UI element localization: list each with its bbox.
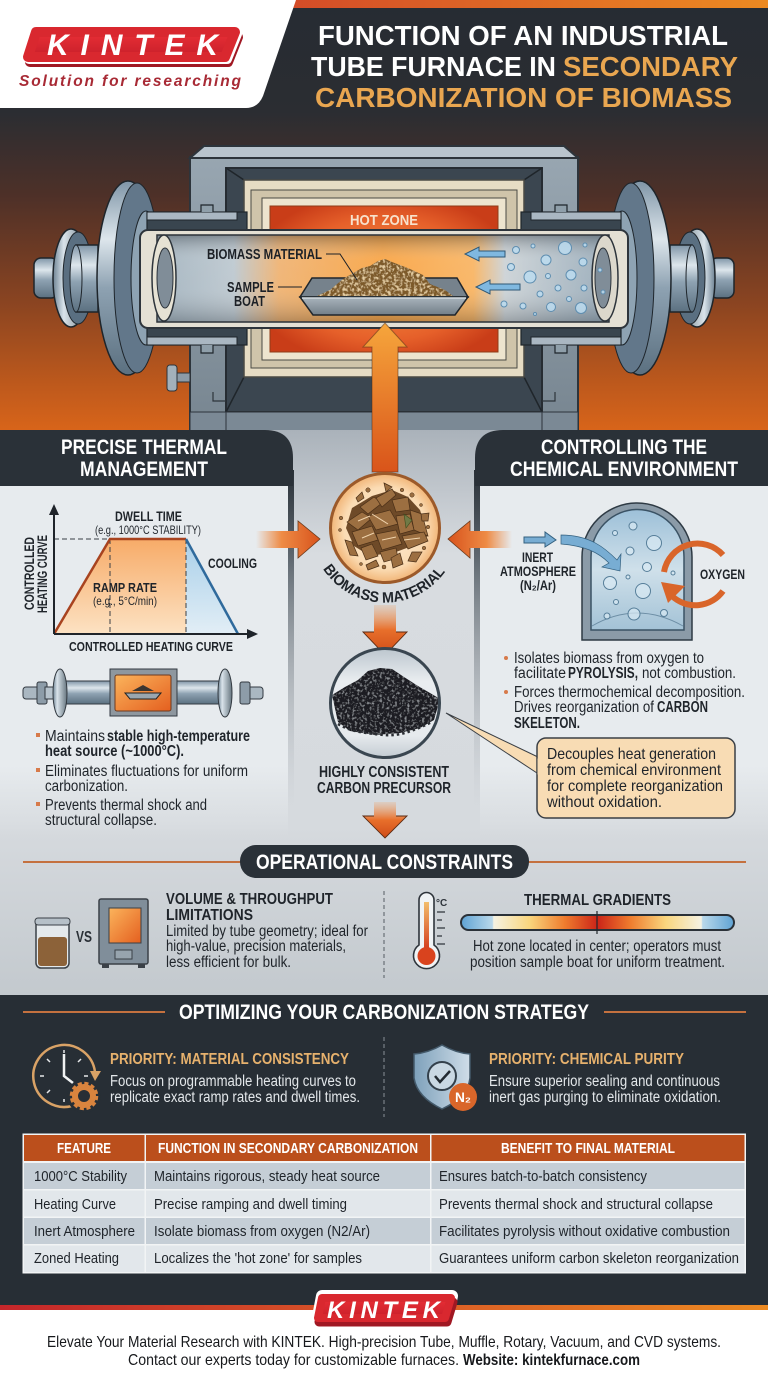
diagram: sealed inert chamber bbox=[582, 503, 692, 640]
bullet list: thermal bbox=[36, 728, 250, 829]
label: inert atmosphere bbox=[500, 549, 576, 593]
right flange assembly bbox=[521, 181, 734, 375]
text: material consistency: PRIORITY: MATERIAL CONSISTENCY bbox=[110, 1051, 350, 1068]
bullet list: chemical: SKELETON. bbox=[514, 715, 580, 732]
footer logo: KINTEK bbox=[327, 1297, 442, 1324]
text: chemical purity: PRIORITY: CHEMICAL PURITY bbox=[489, 1051, 685, 1068]
bullet list: chemical: CARBON bbox=[657, 699, 708, 716]
text: volume and throughput: LIMITATIONS bbox=[166, 907, 253, 924]
text: volume and throughput: Limited by tube geometry; ideal for bbox=[166, 923, 368, 940]
table row: inert atmosphere bbox=[34, 1223, 730, 1240]
heading: PRECISE THERMAL bbox=[61, 436, 227, 459]
heading: CONTROLLING THE bbox=[541, 436, 707, 459]
table row: inert atmosphere: Facilitates pyrolysis without oxidative combustion bbox=[439, 1223, 730, 1240]
logo panel bbox=[0, 0, 296, 108]
text: chemical purity: Ensure superior sealing and continuous bbox=[489, 1073, 720, 1090]
label: inert atmosphere: INERT bbox=[522, 549, 553, 565]
icon: sample jar bbox=[35, 918, 70, 968]
table row: 1000°C stability: 1000°C Stability bbox=[34, 1168, 127, 1185]
heading: MANAGEMENT bbox=[80, 458, 208, 481]
label: biomass material: BIOMASS MATERIAL bbox=[207, 247, 322, 263]
table header: FEATURE bbox=[57, 1141, 111, 1157]
title: FUNCTION OF AN INDUSTRIAL bbox=[318, 20, 728, 51]
chart label: cooling: COOLING bbox=[208, 556, 257, 571]
arrow: biomass to carbon bbox=[363, 605, 407, 655]
arrow: heat from furnace to biomass bbox=[363, 323, 407, 472]
panel: precise thermal management bbox=[0, 430, 294, 836]
chart label: dwell time: DWELL TIME bbox=[115, 509, 182, 524]
logo tagline: Solution for researching bbox=[19, 73, 242, 90]
chart label: dwell time bbox=[95, 509, 201, 537]
icon: miniature tube furnace bbox=[23, 669, 263, 717]
bullet list: chemical: not combustion. bbox=[642, 665, 736, 682]
table row: 1000°C stability: Maintains rigorous, steady heat source bbox=[154, 1168, 380, 1185]
callout: decoupling: from chemical environment bbox=[547, 762, 721, 779]
icon: thermometer: °C bbox=[436, 898, 447, 909]
gas flow arrow upper bbox=[465, 247, 505, 261]
label: carbon precursor: HIGHLY CONSISTENT bbox=[319, 764, 449, 781]
table header bbox=[24, 1135, 744, 1161]
logo: KINTEK badge: KINTEK bbox=[47, 29, 220, 62]
label: inert atmosphere: ATMOSPHERE bbox=[500, 563, 576, 579]
bullet list: thermal: Eliminates fluctuations for uniform bbox=[45, 763, 248, 780]
bullet list: thermal: carbonization. bbox=[45, 778, 128, 795]
icon: shield with N2 bbox=[414, 1045, 477, 1111]
label: carbon precursor bbox=[317, 764, 451, 797]
text: thermal gradients: Hot zone located in center; operators must bbox=[473, 938, 722, 955]
label: hot zone: HOT ZONE bbox=[350, 212, 418, 229]
sample boat with biomass pile bbox=[300, 259, 468, 315]
callout: decoupling: without oxidation. bbox=[546, 794, 662, 811]
table header: BENEFIT TO FINAL MATERIAL bbox=[501, 1141, 675, 1157]
label: biomass material bbox=[207, 247, 357, 280]
chart x-axis label: CONTROLLED HEATING CURVE bbox=[69, 639, 233, 654]
bullet list: chemical: Drives reorganization of bbox=[514, 699, 655, 716]
accent bar top bbox=[0, 0, 768, 8]
arrow: output downward bbox=[363, 802, 407, 838]
table header: FUNCTION IN SECONDARY CARBONIZATION bbox=[158, 1141, 418, 1157]
chart label: ramp rate bbox=[93, 580, 157, 608]
table row: zoned heating: Localizes the 'hot zone' for samples bbox=[154, 1250, 362, 1267]
gas flow arrow lower bbox=[476, 280, 520, 294]
text: material consistency: replicate exact ramp rates and dwell times. bbox=[110, 1089, 360, 1106]
label: oxygen: OXYGEN bbox=[700, 566, 745, 582]
bullet list: thermal: Prevents thermal shock and bbox=[45, 797, 207, 814]
table: features bbox=[22, 1134, 746, 1274]
table row: zoned heating: Zoned Heating bbox=[34, 1250, 119, 1267]
footer text: Website: kintekfurnace.com bbox=[463, 1352, 640, 1369]
table row: 1000°C stability: Ensures batch-to-batch consistency bbox=[439, 1168, 647, 1185]
icon: thermometer bbox=[414, 893, 447, 969]
label: inert atmosphere: (N₂/Ar) bbox=[520, 577, 556, 593]
inert gas bubbles bbox=[501, 242, 605, 316]
arrow: oxygen blocked loop bbox=[661, 544, 723, 605]
text: volume and throughput: less efficient for bulk. bbox=[166, 954, 291, 971]
text: thermal gradients bbox=[461, 892, 734, 971]
text: volume and throughput: VOLUME & THROUGHPUT bbox=[166, 891, 333, 908]
section: optimizing strategy dark background bbox=[0, 995, 768, 1306]
section heading: optimizing: OPTIMIZING YOUR CARBONIZATION STRATEGY bbox=[179, 1001, 589, 1024]
top background gradient bbox=[0, 0, 768, 432]
chart y-axis label bbox=[22, 535, 50, 613]
icon: box furnace bbox=[99, 899, 148, 968]
bullet list: chemical: Isolates biomass from oxygen to bbox=[514, 650, 704, 667]
label: biomass material curved: BIOMASS MATERIAL bbox=[323, 564, 445, 603]
arrow: inert gas in bbox=[524, 532, 556, 547]
label: sample boat: SAMPLE bbox=[227, 280, 274, 296]
left flange assembly bbox=[34, 181, 247, 391]
arrow: inert gas curved flow bbox=[561, 535, 621, 571]
text: volume and throughput bbox=[166, 891, 368, 971]
callout: decoupling bbox=[446, 713, 735, 818]
text: thermal gradients: position sample boat for uniform treatment. bbox=[470, 954, 725, 971]
glass process tube bbox=[140, 230, 628, 328]
label: sample boat: BOAT bbox=[234, 294, 265, 310]
text: material consistency bbox=[110, 1051, 360, 1106]
bullet list: chemical: PYROLYSIS, bbox=[568, 665, 638, 682]
chart: controlled heating curve bbox=[22, 504, 258, 654]
text: thermal gradients: THERMAL GRADIENTS bbox=[524, 892, 671, 909]
tube furnace illustration bbox=[34, 146, 734, 440]
arrow: chemical environment input bbox=[448, 521, 512, 558]
callout: decoupling: for complete reorganization bbox=[547, 778, 723, 795]
table row: heating curve bbox=[34, 1196, 713, 1213]
chart y-axis label: HEATING CURVE bbox=[35, 535, 50, 613]
heading bbox=[61, 436, 227, 481]
icon: clock and gear bbox=[33, 1045, 101, 1113]
bullet list: thermal: heat source (~1000°C). bbox=[45, 743, 184, 760]
chart label: ramp rate: RAMP RATE bbox=[93, 580, 157, 595]
panel: controlling the chemical environment bbox=[474, 430, 768, 836]
chart y-axis label: CONTROLLED bbox=[22, 537, 37, 610]
table row backgrounds bbox=[24, 1163, 744, 1272]
title bbox=[311, 20, 738, 113]
footer white band bbox=[0, 1310, 768, 1376]
table row: heating curve: Heating Curve bbox=[34, 1196, 116, 1213]
bullet list: thermal: structural collapse. bbox=[45, 812, 157, 829]
text: volume and throughput: high-value, precision materials, bbox=[166, 938, 346, 955]
middle light background bbox=[0, 430, 768, 995]
icon: biomass material circle bbox=[330, 474, 440, 582]
bullet list: thermal: Maintains bbox=[45, 728, 105, 745]
table row: inert atmosphere: Isolate biomass from oxygen (N2/Ar) bbox=[154, 1223, 370, 1240]
title: CARBONIZATION OF BIOMASS bbox=[315, 82, 732, 113]
table row: heating curve: Prevents thermal shock and structural collapse bbox=[439, 1196, 713, 1213]
text: material consistency: Focus on programmable heating curves to bbox=[110, 1073, 356, 1090]
table row: inert atmosphere: Inert Atmosphere bbox=[34, 1223, 135, 1240]
bullet list: chemical: facilitate bbox=[514, 665, 566, 682]
text: chemical purity bbox=[489, 1051, 721, 1106]
furnace body bbox=[190, 146, 578, 440]
chart label: dwell time: (e.g., 1000°C STABILITY) bbox=[95, 523, 201, 537]
text: chemical purity: inert gas purging to eliminate oxidation. bbox=[489, 1089, 721, 1106]
bullet list: chemical bbox=[504, 650, 745, 732]
section heading pill: OPERATIONAL CONSTRAINTS bbox=[256, 851, 513, 874]
bullet list: thermal: stable high-temperature bbox=[107, 728, 250, 745]
callout: decoupling: Decouples heat generation bbox=[547, 746, 716, 763]
label: sample boat bbox=[227, 280, 302, 310]
chart label: ramp rate: (e.g., 5°C/min) bbox=[93, 594, 157, 608]
section: operational constraints bbox=[23, 845, 746, 978]
footer text: Contact our experts today for customizable furnaces. bbox=[128, 1352, 459, 1369]
footer text bbox=[47, 1334, 721, 1369]
arrow: thermal management input bbox=[256, 521, 320, 558]
table row: 1000°C stability bbox=[34, 1168, 647, 1185]
heading bbox=[510, 436, 738, 481]
section heading pill bbox=[240, 845, 529, 878]
icon: carbon precursor circle bbox=[330, 648, 440, 758]
title: SECONDARY bbox=[563, 51, 738, 82]
title: TUBE FURNACE IN bbox=[311, 51, 556, 82]
icon: shield with N2: N₂ bbox=[455, 1089, 471, 1105]
table row: zoned heating bbox=[34, 1250, 739, 1267]
footer accent bar bbox=[0, 1305, 768, 1310]
vs label: VS bbox=[76, 929, 92, 946]
table row: heating curve: Precise ramping and dwell timing bbox=[154, 1196, 347, 1213]
label: carbon precursor: CARBON PRECURSOR bbox=[317, 780, 451, 797]
